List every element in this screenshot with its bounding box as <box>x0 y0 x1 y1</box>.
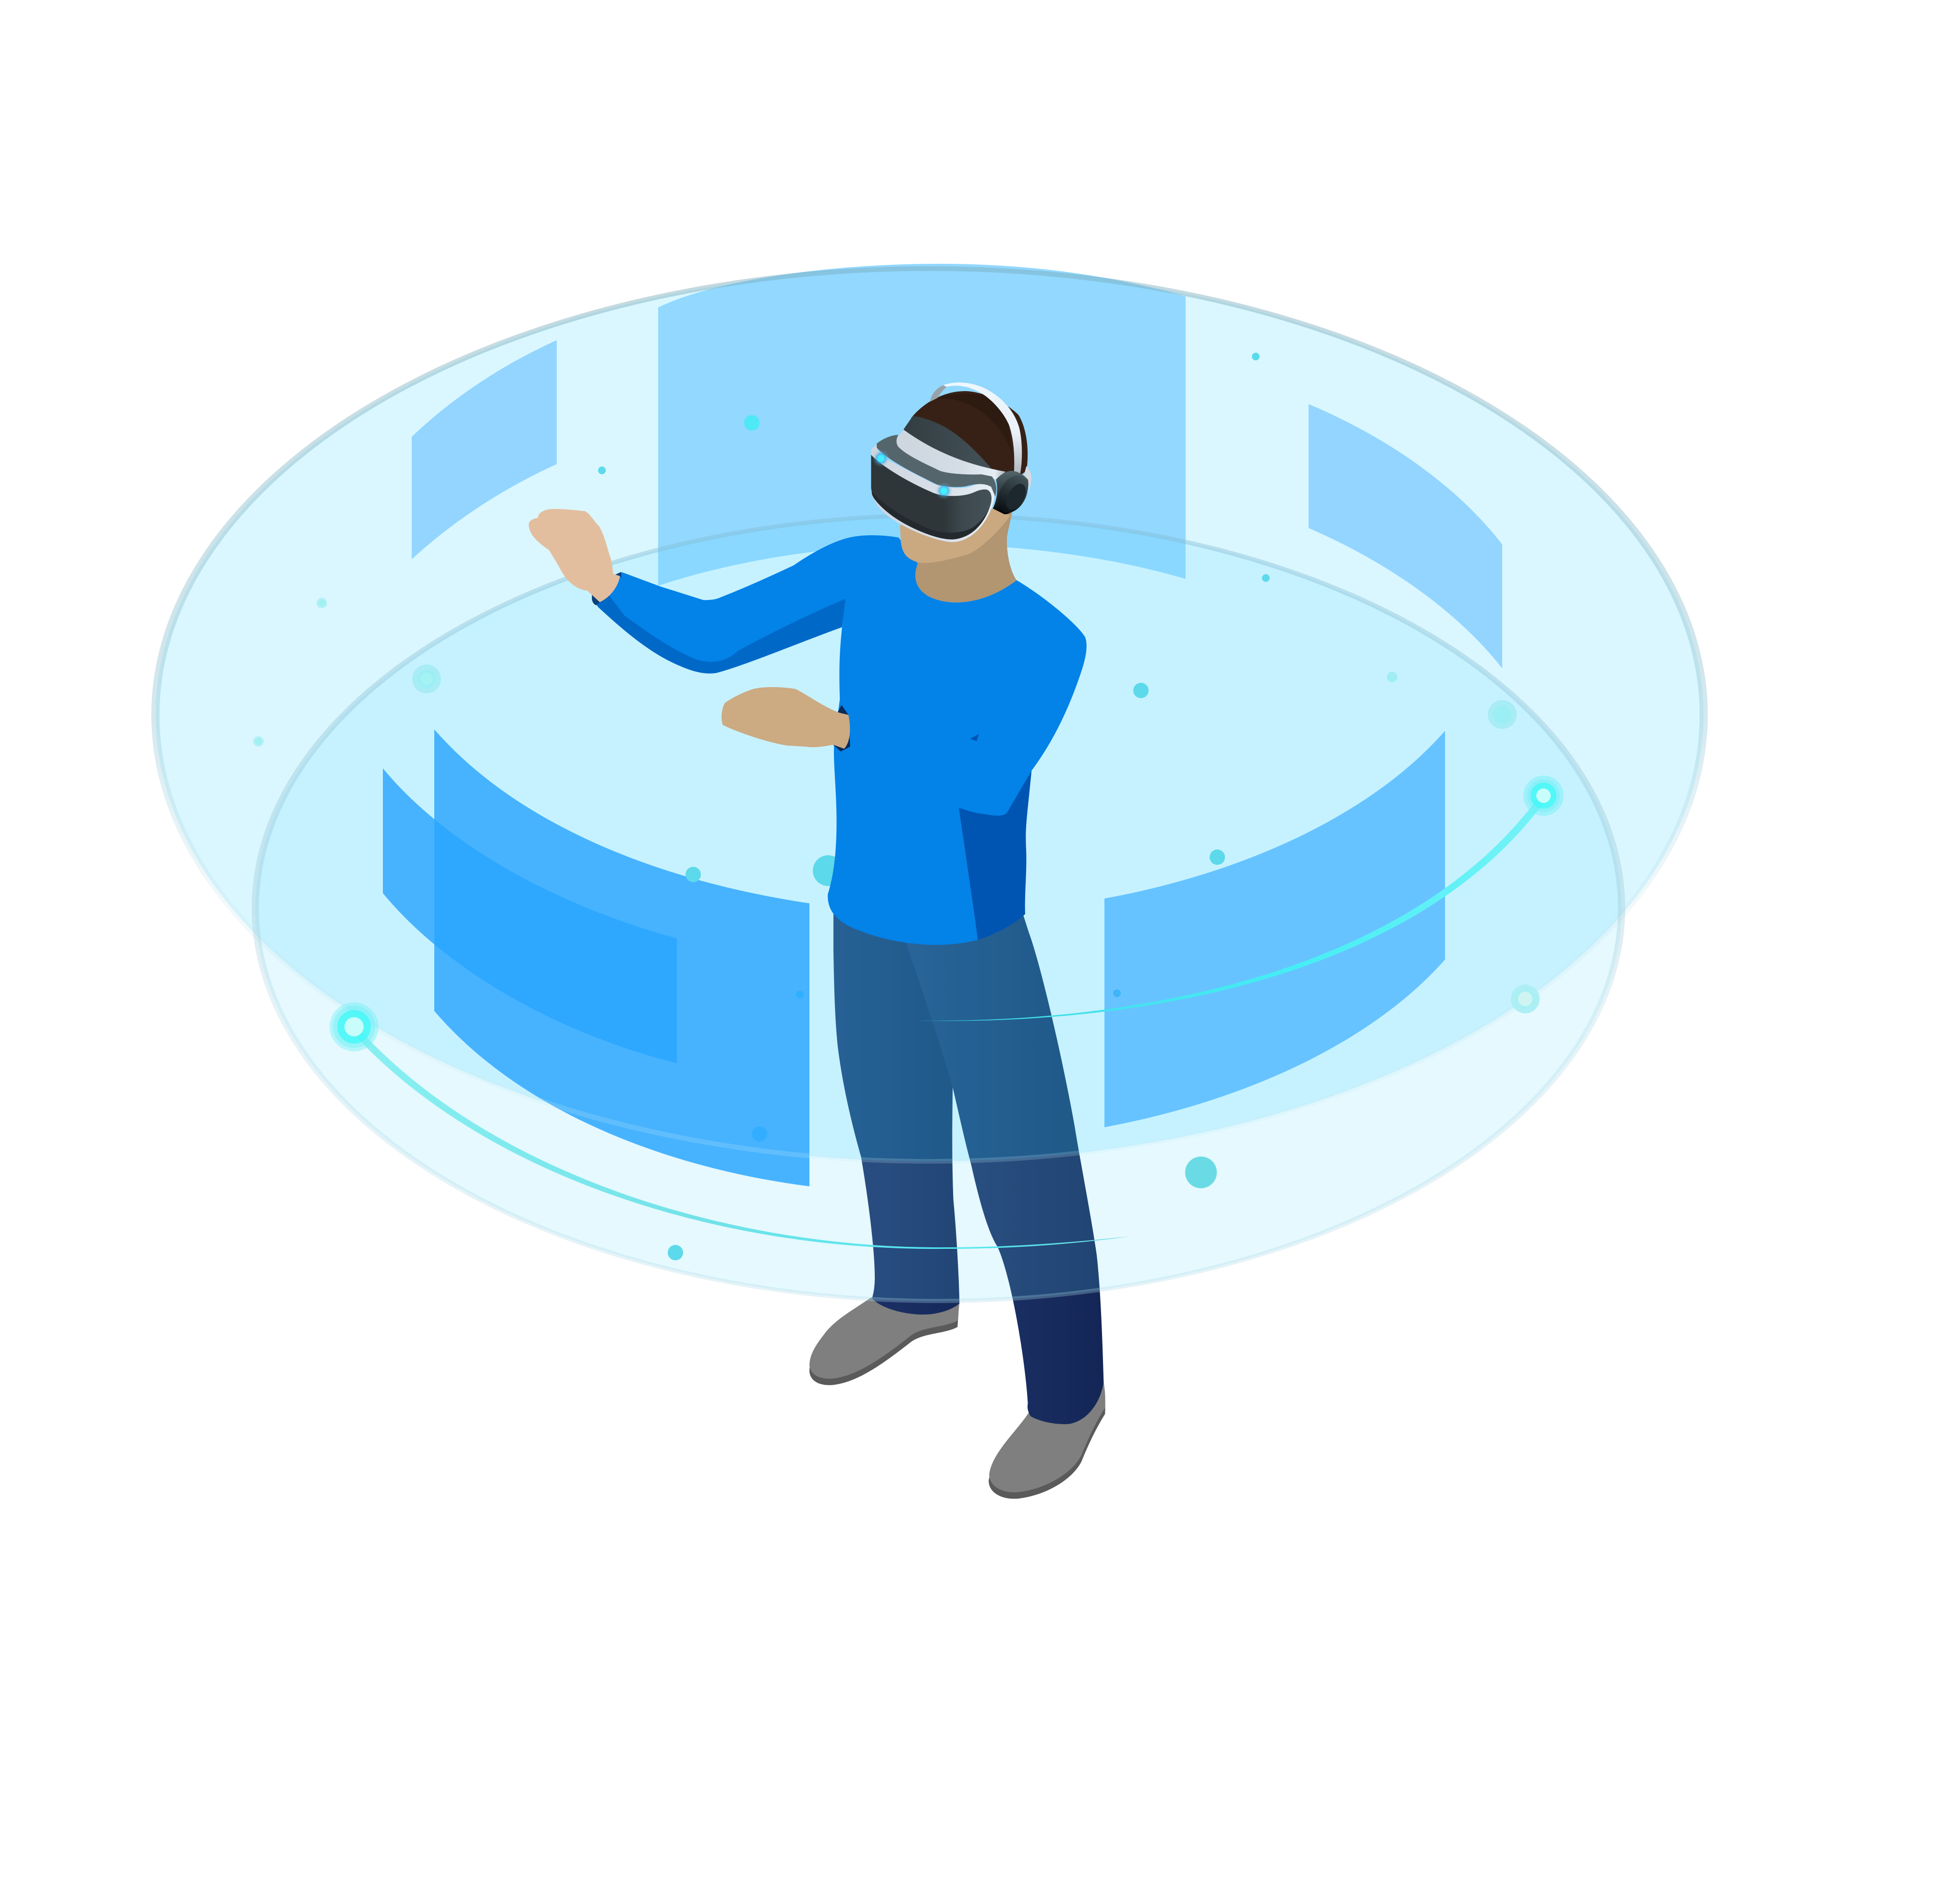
raised hand <box>529 509 621 605</box>
neck <box>909 512 1017 603</box>
hair <box>911 391 1028 479</box>
hand: lower <box>722 687 850 749</box>
panel: back left <box>412 340 557 559</box>
visor front <box>871 455 992 540</box>
fold detail <box>970 734 979 741</box>
hair shade <box>937 394 1014 465</box>
connector line right <box>919 776 1564 1021</box>
visor top <box>877 435 996 496</box>
head with VR headset <box>871 382 1034 563</box>
panel: front right <box>1104 731 1445 1127</box>
LED lights <box>872 450 953 500</box>
shirt <box>609 535 1087 945</box>
panel: front left <box>434 729 809 1186</box>
trousers <box>833 908 1103 1424</box>
cuff <box>592 572 621 605</box>
node left <box>330 1002 379 1051</box>
node right <box>1523 776 1564 816</box>
panel: back centre <box>658 264 1186 586</box>
under sleeve <box>593 591 846 674</box>
headset top strap <box>904 416 992 469</box>
cuff detail <box>833 705 850 751</box>
panel: back right <box>1309 404 1502 668</box>
back panels <box>412 264 1502 668</box>
shoes <box>809 1297 1105 1499</box>
disc rims <box>156 269 1703 1301</box>
torso, sleeves and arm <box>593 512 1087 945</box>
headband <box>930 382 1031 493</box>
panel overlap <box>434 819 677 1063</box>
face <box>900 508 1010 563</box>
visor shade <box>872 492 990 540</box>
floating particles <box>253 353 1540 1260</box>
headset white strap <box>896 430 1005 480</box>
connector line left <box>330 1002 1130 1249</box>
front panels <box>383 729 1445 1186</box>
panel: front left rear layer <box>383 768 677 1063</box>
earpiece <box>992 470 1034 518</box>
hand: upper <box>529 509 620 602</box>
hologram disc: upper <box>156 269 1703 1161</box>
visor rim <box>871 444 994 542</box>
hologram disc: lower <box>256 515 1622 1301</box>
dark torso side <box>959 771 1031 940</box>
